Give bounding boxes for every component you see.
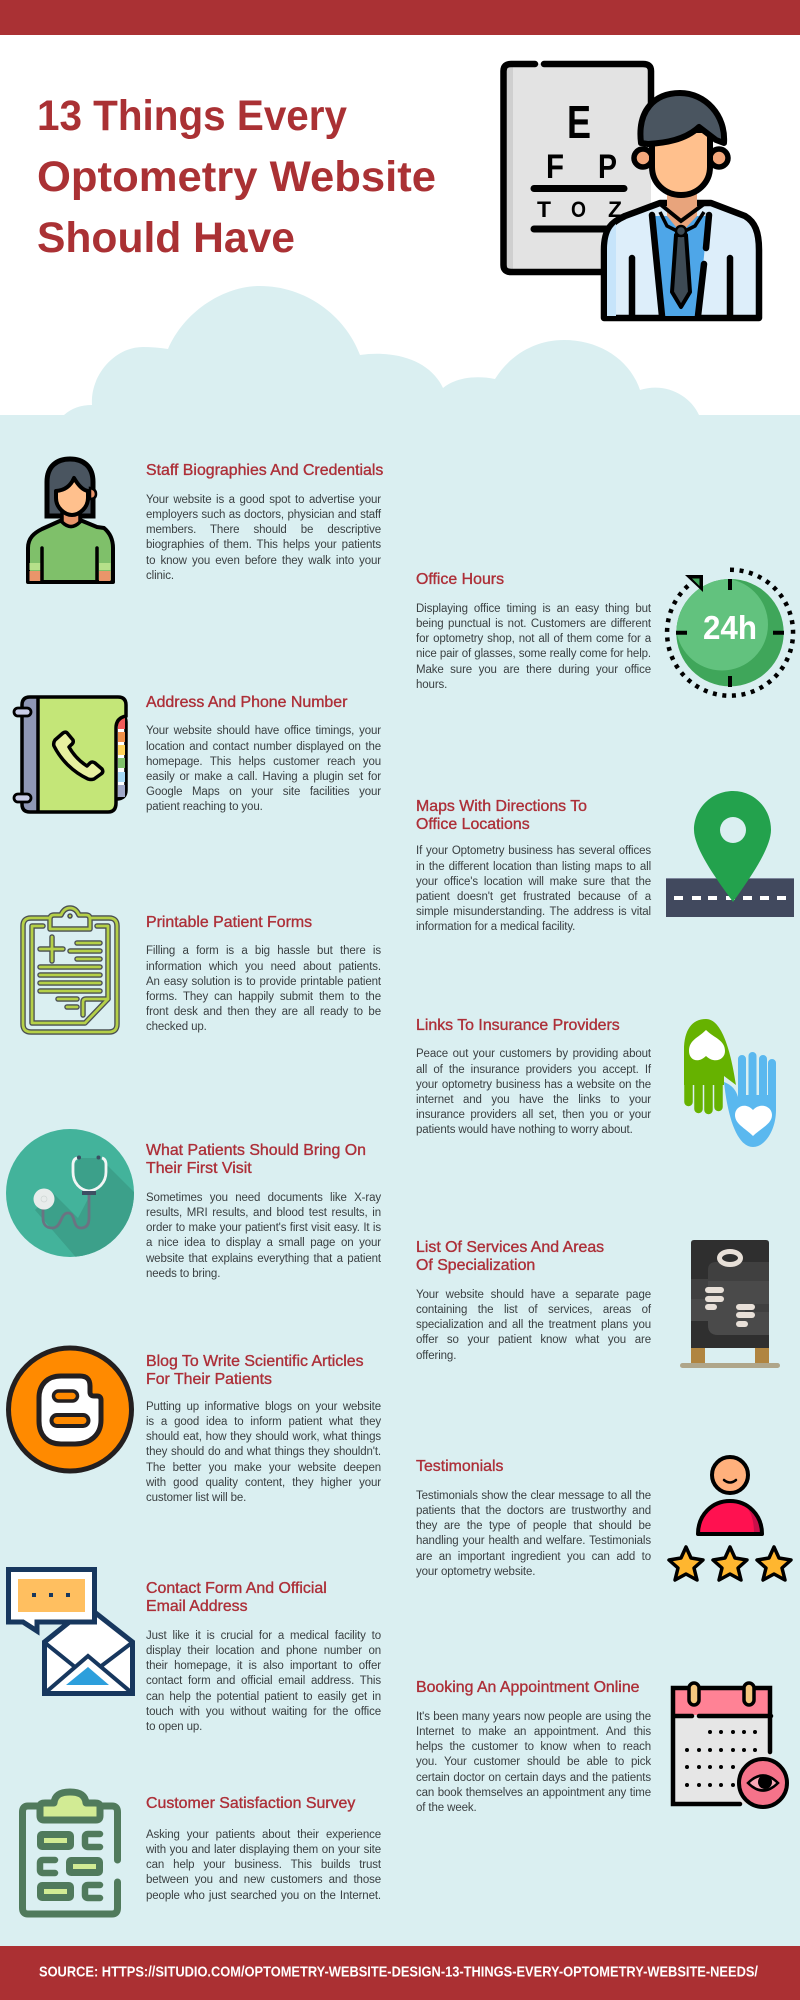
text block: your office's location will make sure that the xyxy=(416,876,651,888)
heading: Printable Patient Forms xyxy=(146,914,312,931)
title: 13 Things Every xyxy=(37,92,347,140)
text block: results, MRI results, and blood test results, in xyxy=(146,1207,381,1219)
text block: internet and you have the links to your xyxy=(416,1094,651,1106)
heading: Contact Form And Official xyxy=(146,1580,327,1597)
heading: Maps With Directions To xyxy=(416,798,587,815)
text block: patient doesn't get frustrated because of a xyxy=(416,891,651,903)
text block: they should do and what things they shouldn't. xyxy=(146,1446,381,1458)
text block: insurance providers all set, then you or your xyxy=(416,1109,651,1121)
text block: order to make your patient's first visit easy. It is xyxy=(146,1222,381,1234)
icon: doctor with eye chart: T xyxy=(537,197,552,222)
heading: Their First Visit xyxy=(146,1160,252,1177)
text block: in the different location than listing maps to all xyxy=(416,861,651,873)
text block: biographies of them. This helps your patients xyxy=(146,539,381,551)
top bar xyxy=(0,0,800,35)
panel: office hours xyxy=(416,568,796,698)
heading xyxy=(146,1142,366,1177)
text block: Your website should have office timings, your xyxy=(146,725,381,737)
heading: Email Address xyxy=(146,1598,248,1615)
text block: should eat, how they should work, what things xyxy=(146,1431,381,1443)
text block: Peace out your customers by providing about xyxy=(416,1048,651,1060)
icon: clipboard form xyxy=(20,905,120,1035)
text block: of the week. xyxy=(416,1802,477,1814)
text block: your optometry business has a website on the xyxy=(416,1079,651,1091)
heading: For Their Patients xyxy=(146,1371,272,1388)
text block: are an important ingredient you can add to xyxy=(416,1550,651,1562)
panel: list of services xyxy=(416,1239,780,1368)
icon: doctor with eye chart: Z xyxy=(608,197,622,222)
icon: doctor with eye chart: F xyxy=(546,148,564,186)
text block: information for a medical facility. xyxy=(416,921,575,933)
heading: Testimonials xyxy=(416,1458,503,1475)
text block: website that explains everything that a patient xyxy=(146,1252,381,1264)
panel: booking an appointment xyxy=(416,1679,789,1814)
icon: address book xyxy=(12,695,128,814)
heading: Office Hours xyxy=(416,571,504,588)
text block: If your Optometry business has several offices xyxy=(416,845,651,857)
text block xyxy=(146,725,381,813)
text block: It's been many years now people are using the xyxy=(416,1711,651,1723)
text block xyxy=(146,1829,381,1902)
text block: being punctual is not. Customers are different xyxy=(416,618,651,630)
text block: front desk and then they are all ready to be xyxy=(146,1006,381,1018)
text block xyxy=(416,1710,651,1816)
text block: can book themselves an appointment any time xyxy=(416,1787,651,1799)
panel: links to insurance providers xyxy=(416,1017,776,1147)
heading: Address And Phone Number xyxy=(146,694,347,711)
heading xyxy=(146,1353,364,1388)
text block: you. Your customer should be able to pick xyxy=(416,1756,651,1768)
panel: contact form xyxy=(6,1567,381,1733)
text block: with good quality content, they higher your xyxy=(146,1477,381,1489)
icon: 24h clock: 24h xyxy=(703,609,757,646)
panel: testimonials xyxy=(416,1455,793,1582)
text block xyxy=(146,945,381,1033)
icon: chat bubble and envelope xyxy=(6,1567,135,1696)
title: Optometry Website xyxy=(37,153,436,201)
icon: doctor with eye chart: E xyxy=(567,96,591,148)
text block: employers such as doctors, physician and staff xyxy=(146,509,381,521)
text block: simple misunderstanding. The address is vital xyxy=(416,906,651,918)
panel: what patients should bring xyxy=(6,1129,382,1280)
icon: stethoscope xyxy=(6,1129,134,1257)
text block: The better you make your website deepen xyxy=(146,1462,381,1474)
heading: Customer Satisfaction Survey xyxy=(146,1795,355,1812)
title: Should Have xyxy=(37,214,295,262)
panel: staff biographies xyxy=(26,456,383,584)
text block: An easy solution is to provide printable patient xyxy=(146,976,381,988)
text block: is a good idea to inform patient what they xyxy=(146,1416,381,1428)
panel: address and phone number xyxy=(12,694,381,814)
text block: location and contact number displayed on the xyxy=(146,741,381,753)
text block: Just like it is crucial for a medical facility to xyxy=(146,1630,381,1642)
icon: map pin on road xyxy=(666,791,794,917)
text block: can help your business. This builds trust xyxy=(146,1859,381,1871)
icon: person with three stars xyxy=(667,1455,793,1582)
text block xyxy=(416,845,652,933)
text block: Google Maps on your site facilities your xyxy=(146,786,381,798)
text block: display their location and phone number on xyxy=(146,1645,381,1657)
text block: contact form and official email address. This xyxy=(146,1675,381,1687)
text block: can help the potential patient to easily get in xyxy=(146,1690,381,1702)
heading: Office Locations xyxy=(416,816,530,833)
heading xyxy=(416,798,587,833)
text block xyxy=(146,494,382,582)
heading: What Patients Should Bring On xyxy=(146,1142,366,1159)
text block: a nice idea to display a small page on your xyxy=(146,1237,381,1249)
heading xyxy=(416,1239,604,1274)
text block: with you and later displaying them on your site xyxy=(146,1844,381,1856)
heading: List Of Services And Areas xyxy=(416,1239,604,1256)
text block xyxy=(146,1630,381,1733)
text block: they are the type of people that should be xyxy=(416,1520,651,1532)
text block: Your website is a good spot to advertise your xyxy=(146,494,381,506)
title xyxy=(37,92,436,262)
text block: people who just searched you on the Internet. xyxy=(146,1890,381,1902)
icon: doctor with eye chart xyxy=(500,60,762,322)
text block: patients would have nothing to worry about. xyxy=(416,1124,633,1136)
text block: patients that the doctors are trustworthy and xyxy=(416,1505,651,1517)
text block xyxy=(416,1048,652,1136)
text block: handling your health and welfare. Testimonials xyxy=(416,1535,651,1547)
text block: to know you even before they walk into your xyxy=(146,554,381,566)
heading: Booking An Appointment Online xyxy=(416,1679,640,1696)
text block: information which you need about patients. xyxy=(146,961,381,973)
text block: to open up. xyxy=(146,1721,202,1733)
text block: for optometry shop, not all of them come for a xyxy=(416,633,651,645)
text block: clinic. xyxy=(146,570,174,582)
text block xyxy=(416,1490,651,1578)
text block xyxy=(416,1289,652,1362)
text block: offering. xyxy=(416,1350,456,1362)
text block xyxy=(146,1192,382,1280)
heading xyxy=(146,1580,327,1615)
panel: customer satisfaction survey xyxy=(19,1788,381,1918)
text block: all of the insurance providers you accept. If xyxy=(416,1064,651,1076)
text block: easily or make a call. Having a plugin set for xyxy=(146,771,381,783)
text block: helps the customer to know when to reach xyxy=(416,1741,651,1753)
icon: helping hands with hearts xyxy=(684,1019,776,1147)
text block: offer so your patient know what you are xyxy=(416,1334,651,1346)
text block: needs to bring. xyxy=(146,1268,220,1280)
panel: maps with directions xyxy=(416,791,794,933)
icon: woman staff member xyxy=(26,456,115,584)
text block: customer list will be. xyxy=(146,1492,246,1504)
footer bar xyxy=(0,1946,800,2000)
icon: doctor with eye chart: O xyxy=(571,197,586,222)
text block: hours. xyxy=(416,679,447,691)
text block: homepage. This helps customer reach you xyxy=(146,756,381,768)
text block: containing the list of services, areas of xyxy=(416,1304,651,1316)
icon: doctor with eye chart: P xyxy=(598,148,617,186)
heading: Staff Biographies And Credentials xyxy=(146,462,383,479)
text block: your optometry website. xyxy=(416,1566,535,1578)
icon: blogger logo xyxy=(6,1346,134,1474)
text block: Asking your patients about their experience xyxy=(146,1829,381,1841)
text block: Your website should have a separate page xyxy=(416,1289,651,1301)
icon: chalkboard sign xyxy=(680,1240,780,1368)
text block: specialization and all the treatment plans you xyxy=(416,1319,651,1331)
text block: between you and new customers and those xyxy=(146,1874,381,1886)
text block: Filling a form is a big hassle but there is xyxy=(146,945,381,957)
text block: touch with you without waiting for the office xyxy=(146,1706,381,1718)
panel: printable patient forms xyxy=(20,905,381,1035)
text block: nice pair of glasses, some really come for help. xyxy=(416,648,651,660)
heading: Blog To Write Scientific Articles xyxy=(146,1353,364,1370)
icon: survey clipboard xyxy=(19,1788,121,1918)
text block: Sometimes you need documents like X-ray xyxy=(146,1192,381,1204)
text block xyxy=(416,603,652,691)
text block: Make sure you are there during your office xyxy=(416,664,651,676)
text block xyxy=(146,1401,382,1504)
icon: 24h clock xyxy=(664,568,796,698)
text block: certain doctor on certain days and the patients xyxy=(416,1772,651,1784)
text block: their homepage, it is also important to offer xyxy=(146,1660,381,1672)
text block: Putting up informative blogs on your website xyxy=(146,1401,381,1413)
panel: blog xyxy=(6,1346,382,1504)
text block: Testimonials show the clear message to all the xyxy=(416,1490,651,1502)
text block: members. There should be descriptive xyxy=(146,524,381,536)
text block: patient reaching to you. xyxy=(146,801,263,813)
text block: Displaying office timing is an easy thing but xyxy=(416,603,651,615)
text block: Internet to make an appointment. And this xyxy=(416,1726,651,1738)
heading: Of Specialization xyxy=(416,1257,535,1274)
heading: Links To Insurance Providers xyxy=(416,1017,620,1034)
icon: calendar with eye xyxy=(665,1675,800,1810)
text block: checked up. xyxy=(146,1021,207,1033)
text block: forms. They can happily submit them to the xyxy=(146,991,381,1003)
